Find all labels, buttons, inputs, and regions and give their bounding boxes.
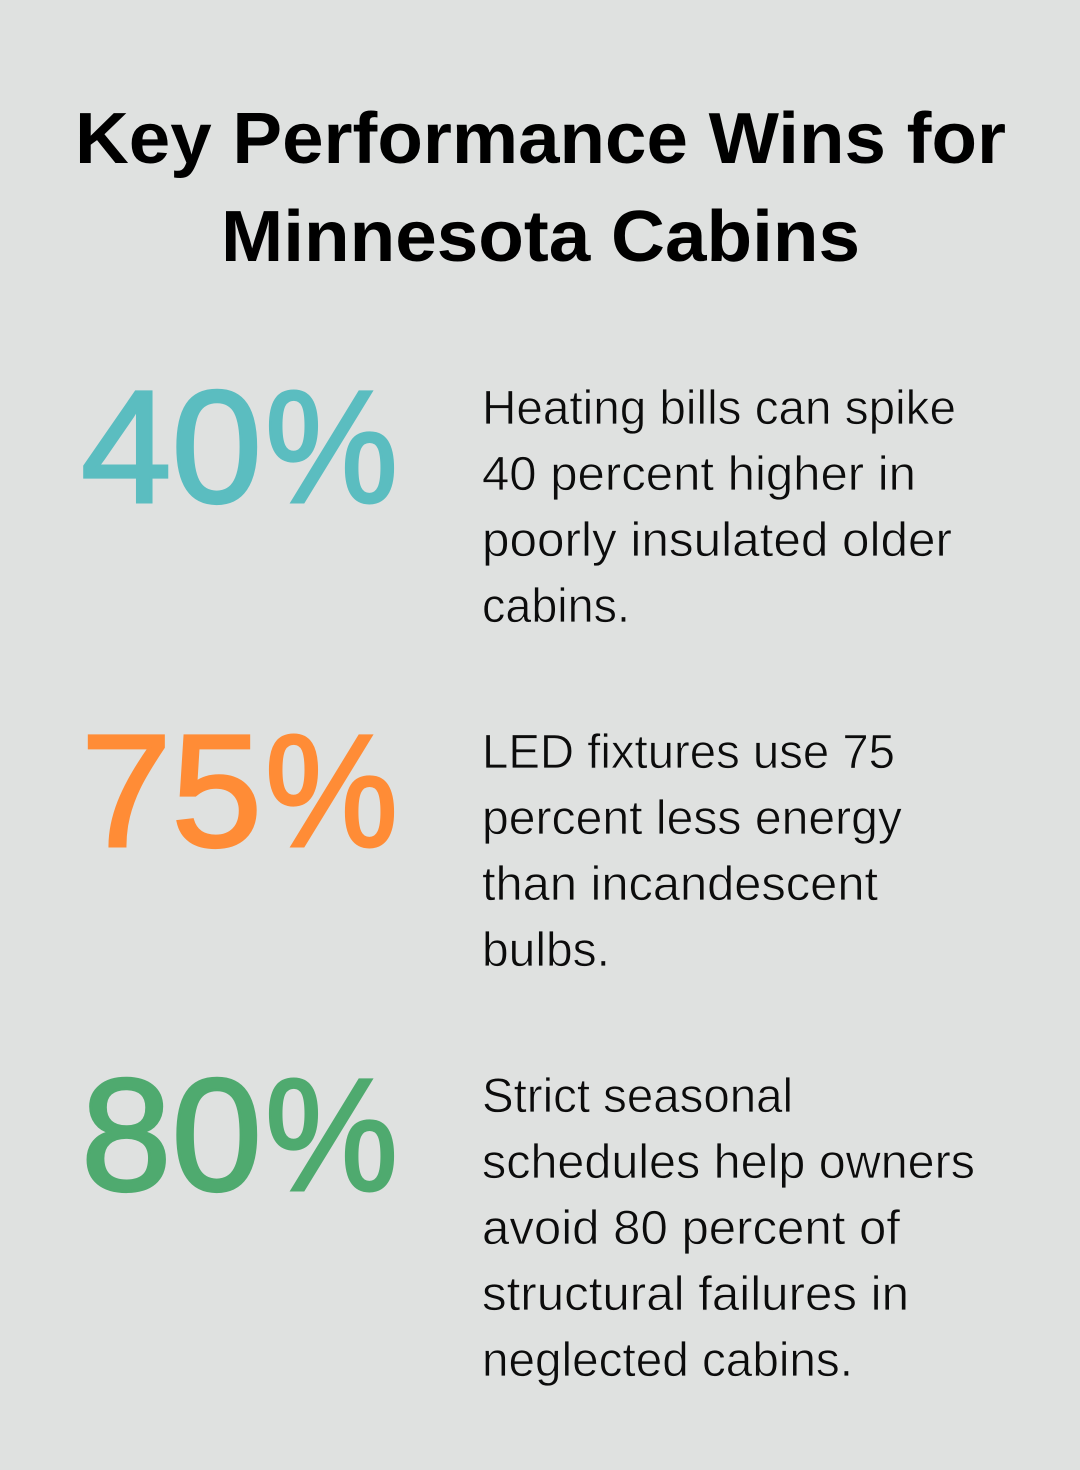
description: heating bills: Heating bills can spike xyxy=(482,382,956,435)
title xyxy=(75,99,1006,277)
description: heating bills: cabins. xyxy=(482,580,630,633)
big number: 75%: % xyxy=(265,701,398,880)
description: LED fixtures: percent less energy xyxy=(482,792,902,845)
description: seasonal schedules: avoid 80 percent of xyxy=(482,1202,901,1255)
big number: 40%: 40 xyxy=(81,357,262,536)
title: Minnesota Cabins xyxy=(221,197,860,277)
description: LED fixtures xyxy=(482,726,902,977)
description: seasonal schedules xyxy=(482,1070,975,1387)
description: LED fixtures: LED fixtures use 75 xyxy=(482,726,895,779)
stat row: 40 percent xyxy=(81,357,956,633)
description: seasonal schedules: Strict seasonal xyxy=(482,1070,793,1123)
description: seasonal schedules: schedules help owners xyxy=(482,1136,975,1189)
stat row: 80 percent xyxy=(81,1045,975,1387)
description: LED fixtures: than incandescent xyxy=(482,858,878,911)
big number: 75%: 75 xyxy=(81,701,262,880)
big number: 40%: % xyxy=(265,357,398,536)
title: Key Performance Wins for xyxy=(75,99,1006,179)
description: heating bills: poorly insulated older xyxy=(482,514,952,567)
big number: 80%: 80 xyxy=(81,1045,262,1224)
description: LED fixtures: bulbs. xyxy=(482,924,610,977)
big number: 80%: % xyxy=(265,1045,398,1224)
description: seasonal schedules: structural failures in xyxy=(482,1268,909,1321)
description: heating bills xyxy=(482,382,956,633)
description: seasonal schedules: neglected cabins. xyxy=(482,1334,853,1387)
description: heating bills: 40 percent higher in xyxy=(482,448,916,501)
stat row: 75 percent xyxy=(81,701,902,977)
